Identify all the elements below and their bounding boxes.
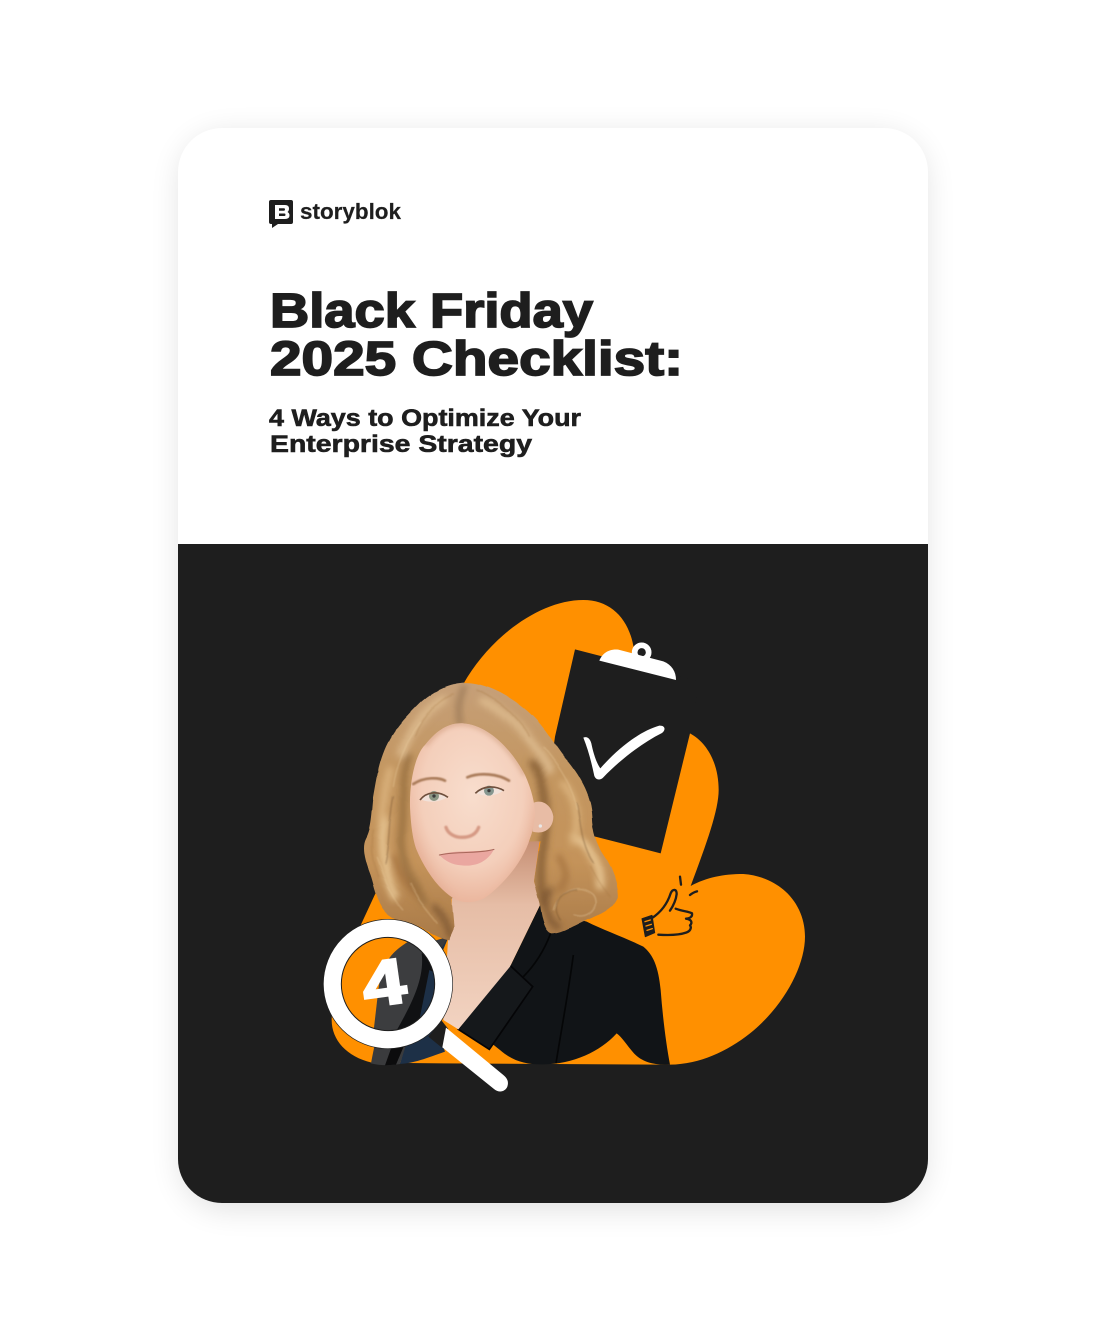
magnifier number 4: 4: [358, 945, 411, 1022]
icon: check mark: [583, 726, 665, 779]
panel: white header: [178, 128, 928, 544]
magnifier lens: [323, 919, 453, 1049]
person: facial features: [412, 724, 534, 886]
icon: storyblok logo: [269, 200, 293, 228]
person: earring: [539, 824, 542, 828]
person: jacket: [371, 902, 670, 1065]
title: 2025 Checklist:: [270, 333, 683, 386]
card shadow: [182, 136, 924, 1208]
person: neck and chest: [443, 838, 542, 1029]
logo wordmark: storyblok: [300, 199, 402, 224]
subtitle: 4 Ways to Optimize Your: [269, 405, 581, 432]
clipboard board: [543, 649, 700, 853]
magnifier handle collar: [428, 1021, 448, 1049]
subtitle: Enterprise Strategy: [270, 431, 533, 458]
magnifier handle: [442, 1028, 508, 1091]
title: Black Friday: [270, 285, 593, 338]
subtitle: [269, 405, 581, 458]
person: hair: [364, 683, 618, 939]
person: hair strands: [372, 687, 610, 935]
illustration: portrait with checklist icons: [323, 600, 805, 1091]
panel: dark lower section: [178, 544, 928, 1203]
icon: thumbs up: [642, 877, 697, 937]
person: face: [410, 723, 535, 902]
person: ear: [533, 802, 553, 833]
clipboard clip: [599, 645, 676, 680]
title: [270, 285, 683, 386]
panel: checklist card: [178, 128, 928, 1203]
orange blob: [332, 600, 805, 1065]
